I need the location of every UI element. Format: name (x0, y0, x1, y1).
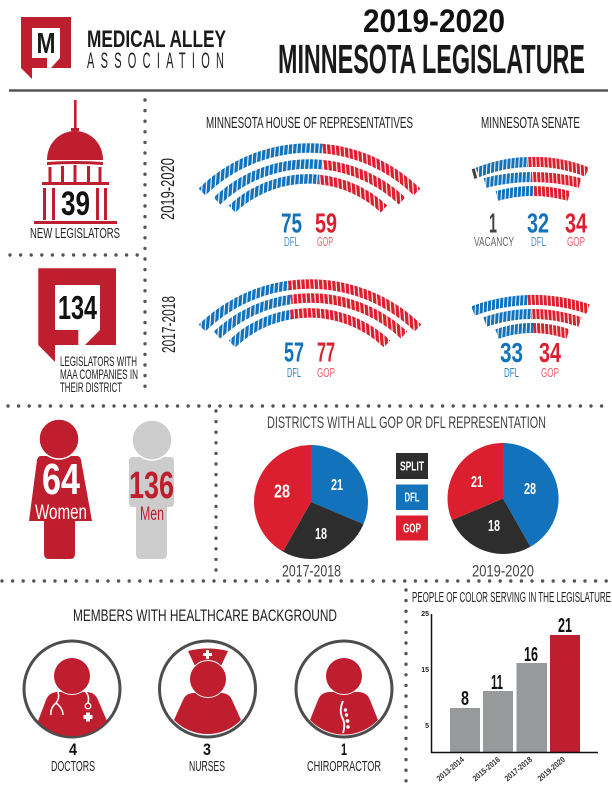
bar chart: people of color: 21 (558, 615, 572, 637)
chart: house seats 2019-2020 (202, 148, 417, 209)
stats: house 2019-2020: 75 (281, 208, 302, 238)
icon: capitol with new legislators count: NEW LEGISLATORS (30, 225, 120, 242)
legend: SPLIT (400, 460, 424, 474)
logo: Medical Alley Association (21, 17, 226, 79)
label: 3 nurses: 3 (203, 740, 211, 759)
stats: senate 2019-2020: VACANCY (474, 235, 514, 249)
icon: chiropractor (296, 641, 392, 737)
bar chart: people of color: 2019-2020 (536, 755, 567, 783)
bar chart: people of color: 11 (491, 672, 503, 694)
stats: senate 2017-2018 (500, 337, 561, 380)
label: 3 nurses: NURSES (189, 758, 225, 775)
bar chart: people of color: 25 (421, 611, 429, 618)
stats: senate 2017-2018: DFL (504, 366, 519, 380)
callout: 134 legislators with MAA companies: LEGISLATORS WITH (60, 353, 137, 369)
label: 2017-2018: 2017-2018 (159, 296, 179, 353)
label: 4 doctors (51, 740, 95, 775)
chart: house seats 2017-2018 (202, 284, 418, 344)
label: 3 nurses (189, 740, 225, 775)
stats: senate 2019-2020: 1 (489, 208, 497, 238)
icon: man 136: 136 (129, 465, 174, 507)
stats: house 2017-2018: GOP (317, 366, 335, 380)
pie chart: 2017-2018 (254, 445, 368, 580)
title (278, 3, 585, 82)
bar chart: people of color: 2013-2014 (435, 755, 466, 783)
label: 1 chiropractor: 1 (341, 740, 347, 759)
label: 4 doctors: DOCTORS (51, 758, 95, 775)
label: 2019-2020: 2019-2020 (158, 158, 178, 220)
icon: capitol with new legislators count (30, 100, 120, 242)
logo: Medical Alley Association: M (36, 28, 56, 60)
callout: 134 legislators with MAA companies: THEIR DISTRICT (60, 379, 122, 395)
pie chart: 2019-2020: 28 (524, 481, 536, 498)
stats: house 2017-2018 (284, 336, 335, 380)
bar chart: people of color: 8 (461, 688, 469, 710)
icon: man 136 (129, 420, 174, 559)
stats: senate 2019-2020: DFL (531, 235, 546, 249)
stats: house 2017-2018: DFL (287, 366, 301, 380)
logo: Medical Alley Association: MEDICAL ALLEY (87, 26, 226, 53)
stats: senate 2019-2020: 34 (565, 208, 587, 238)
pie chart: 2017-2018: 28 (274, 482, 290, 502)
chart: senate seats 2019-2020 (473, 162, 587, 196)
callout: 134 legislators with MAA companies: 134 (58, 289, 97, 326)
legend: GOP (403, 522, 421, 536)
stats: house 2017-2018: 77 (317, 336, 335, 368)
logo: Medical Alley Association: ASSOCIATION (87, 48, 224, 73)
bar chart: people of color: 2015-2016 (471, 755, 502, 783)
stats: senate 2017-2018: 34 (539, 337, 561, 368)
pie chart: 2017-2018: 18 (315, 526, 327, 543)
bar chart: people of color: 5 (425, 723, 429, 730)
stats: senate 2017-2018: GOP (541, 366, 559, 380)
stats: house 2019-2020: 59 (315, 208, 337, 238)
bar chart: people of color (421, 611, 598, 783)
title: 2019-2020 (363, 3, 505, 39)
pie chart: 2017-2018: 21 (331, 477, 343, 494)
label: 1 chiropractor (307, 740, 381, 775)
bar chart: people of color: 15 (421, 667, 429, 674)
chart: senate seats 2017-2018 (473, 300, 588, 334)
label: 1 chiropractor: CHIROPRACTOR (307, 758, 381, 775)
pie chart: 2019-2020: 2019-2020 (472, 562, 534, 580)
stats: house 2019-2020: GOP (317, 235, 333, 249)
bar chart: people of color: 16 (524, 644, 538, 666)
icon: doctor (24, 641, 120, 737)
stats: house 2019-2020 (281, 208, 337, 249)
callout: 134 legislators with MAA companies: MAA COMPANIES IN (60, 366, 138, 382)
legend: DFL (404, 490, 420, 504)
stats: senate 2019-2020 (474, 208, 587, 249)
stats: senate 2019-2020: GOP (567, 235, 585, 249)
icon: woman 64: 64 (42, 455, 80, 504)
legend (396, 453, 428, 540)
stats: senate 2019-2020: 32 (527, 208, 549, 238)
pie chart: 2019-2020: 18 (488, 518, 500, 535)
stats: house 2019-2020: DFL (284, 235, 299, 249)
stats: senate 2017-2018: 33 (500, 337, 523, 368)
stats: house 2017-2018: 57 (284, 336, 304, 368)
icon: man 136: Men (140, 504, 164, 525)
pie chart: 2019-2020 (448, 443, 559, 580)
icon: nurse (160, 641, 256, 737)
callout: 134 legislators with MAA companies (38, 268, 138, 395)
pie chart: 2019-2020: 21 (471, 474, 483, 491)
pie chart: 2017-2018: 2017-2018 (282, 562, 341, 580)
heading: healthcare: MEMBERS WITH HEALTHCARE BACKGROUND (73, 606, 337, 625)
icon: woman 64 (29, 419, 92, 559)
label: 4 doctors: 4 (69, 740, 77, 759)
bar chart: people of color: 2017-2018 (503, 755, 534, 783)
icon: capitol with new legislators count: 39 (61, 185, 90, 223)
icon: woman 64: Women (35, 501, 87, 524)
heading: house: MINNESOTA HOUSE OF REPRESENTATIVES (206, 115, 413, 132)
